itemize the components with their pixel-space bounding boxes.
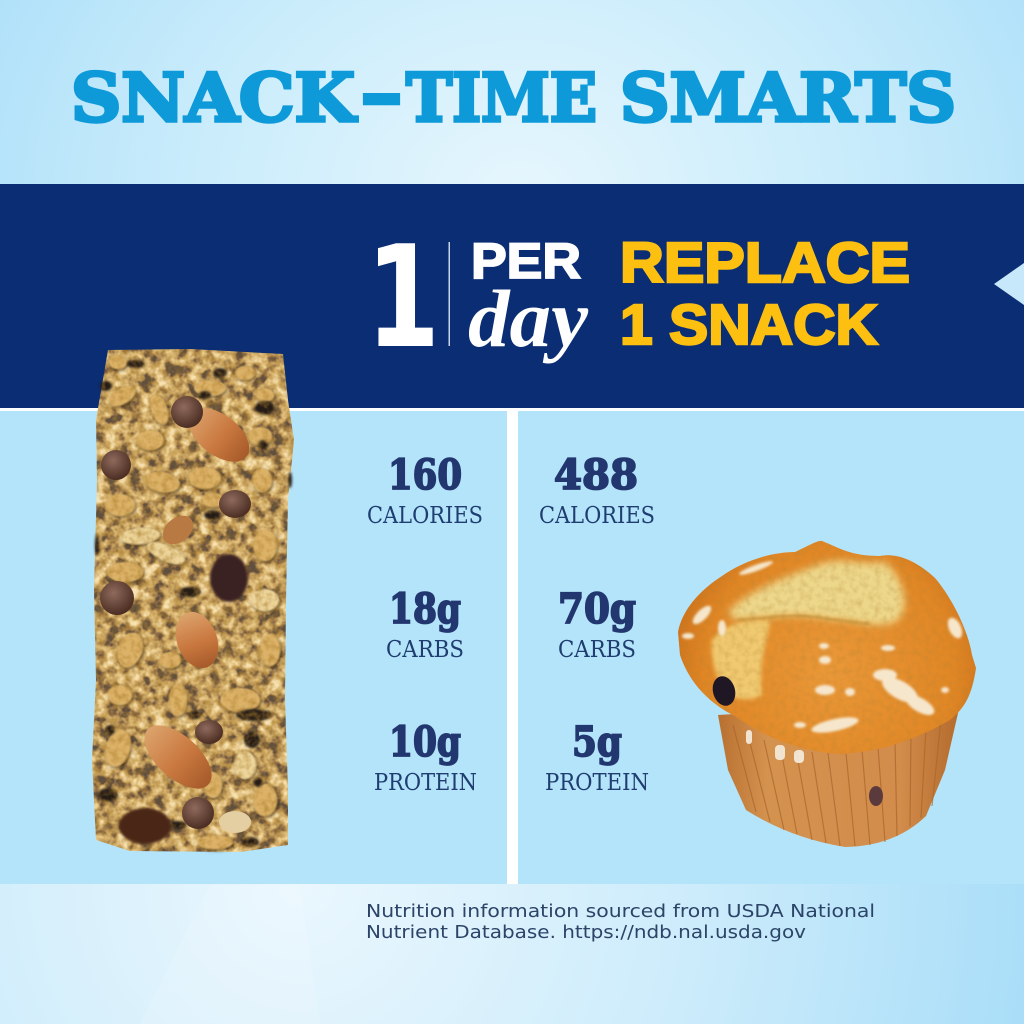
oats <box>101 355 280 849</box>
stat: carbs <box>558 585 636 663</box>
pale dough fold <box>712 620 770 699</box>
replace: REPLACE <box>620 231 910 294</box>
stat: calories: 488 <box>554 451 638 499</box>
muffin top <box>678 541 976 754</box>
stat: protein: PROTEIN <box>545 770 649 796</box>
stat: protein: 5g <box>572 718 622 766</box>
source note: Nutrient Database. https://ndb.nal.usda.gov <box>366 922 806 943</box>
title: SNACK <box>71 59 357 137</box>
title: SMARTS <box>620 59 956 137</box>
panel: granola bar nutrition <box>0 411 507 884</box>
stat: carbs: CARBS <box>558 637 636 663</box>
stat: carbs: CARBS <box>386 637 464 663</box>
banner notch arrow <box>994 263 1024 305</box>
stat: carbs: 70g <box>558 585 636 633</box>
muffin <box>678 541 976 847</box>
blueberry <box>709 674 739 708</box>
day: day <box>468 273 589 364</box>
white icing edge <box>746 730 804 763</box>
replace one snack <box>620 231 910 356</box>
numeral one: 1 <box>366 216 440 380</box>
source note: Nutrition information sourced from USDA National <box>366 901 875 922</box>
muffin crease <box>738 616 870 624</box>
one per day badge <box>366 216 589 380</box>
panel: muffin nutrition <box>518 411 1024 884</box>
cup pleats <box>733 720 941 846</box>
stat: calories: CALORIES <box>539 503 655 529</box>
paper cup <box>718 700 961 847</box>
bar crumb texture <box>92 349 294 852</box>
chocolate chips <box>100 396 251 829</box>
title: - <box>360 55 403 133</box>
stat: protein <box>374 718 477 796</box>
raisins <box>119 554 248 844</box>
stat: calories: 160 <box>388 451 462 499</box>
source note <box>366 901 875 943</box>
almonds <box>133 398 259 800</box>
pale dough top <box>728 561 905 625</box>
per: PER <box>471 233 581 289</box>
stat: calories: CALORIES <box>367 503 483 529</box>
stat: carbs: 18g <box>389 585 461 633</box>
stat: carbs <box>386 585 464 663</box>
blueberry in cup <box>869 786 883 806</box>
dark seeds <box>95 360 292 847</box>
stat: calories <box>539 451 655 529</box>
stat: protein <box>545 718 649 796</box>
stat: protein: PROTEIN <box>374 770 477 796</box>
granola bar stats <box>367 451 483 796</box>
stat: calories <box>367 451 483 529</box>
divider <box>448 242 450 346</box>
granola bar <box>92 349 294 852</box>
bar body <box>92 349 294 852</box>
one snack: 1 SNACK <box>620 293 878 356</box>
stat: protein: 10g <box>389 718 461 766</box>
sugar crumbs <box>682 559 965 736</box>
title: TIME <box>406 59 597 137</box>
muffin crust texture <box>678 541 976 754</box>
white nut <box>219 811 251 833</box>
navy banner <box>0 184 1024 408</box>
panel: white frame <box>0 408 1024 884</box>
muffin stats <box>539 451 655 796</box>
title <box>71 55 956 137</box>
